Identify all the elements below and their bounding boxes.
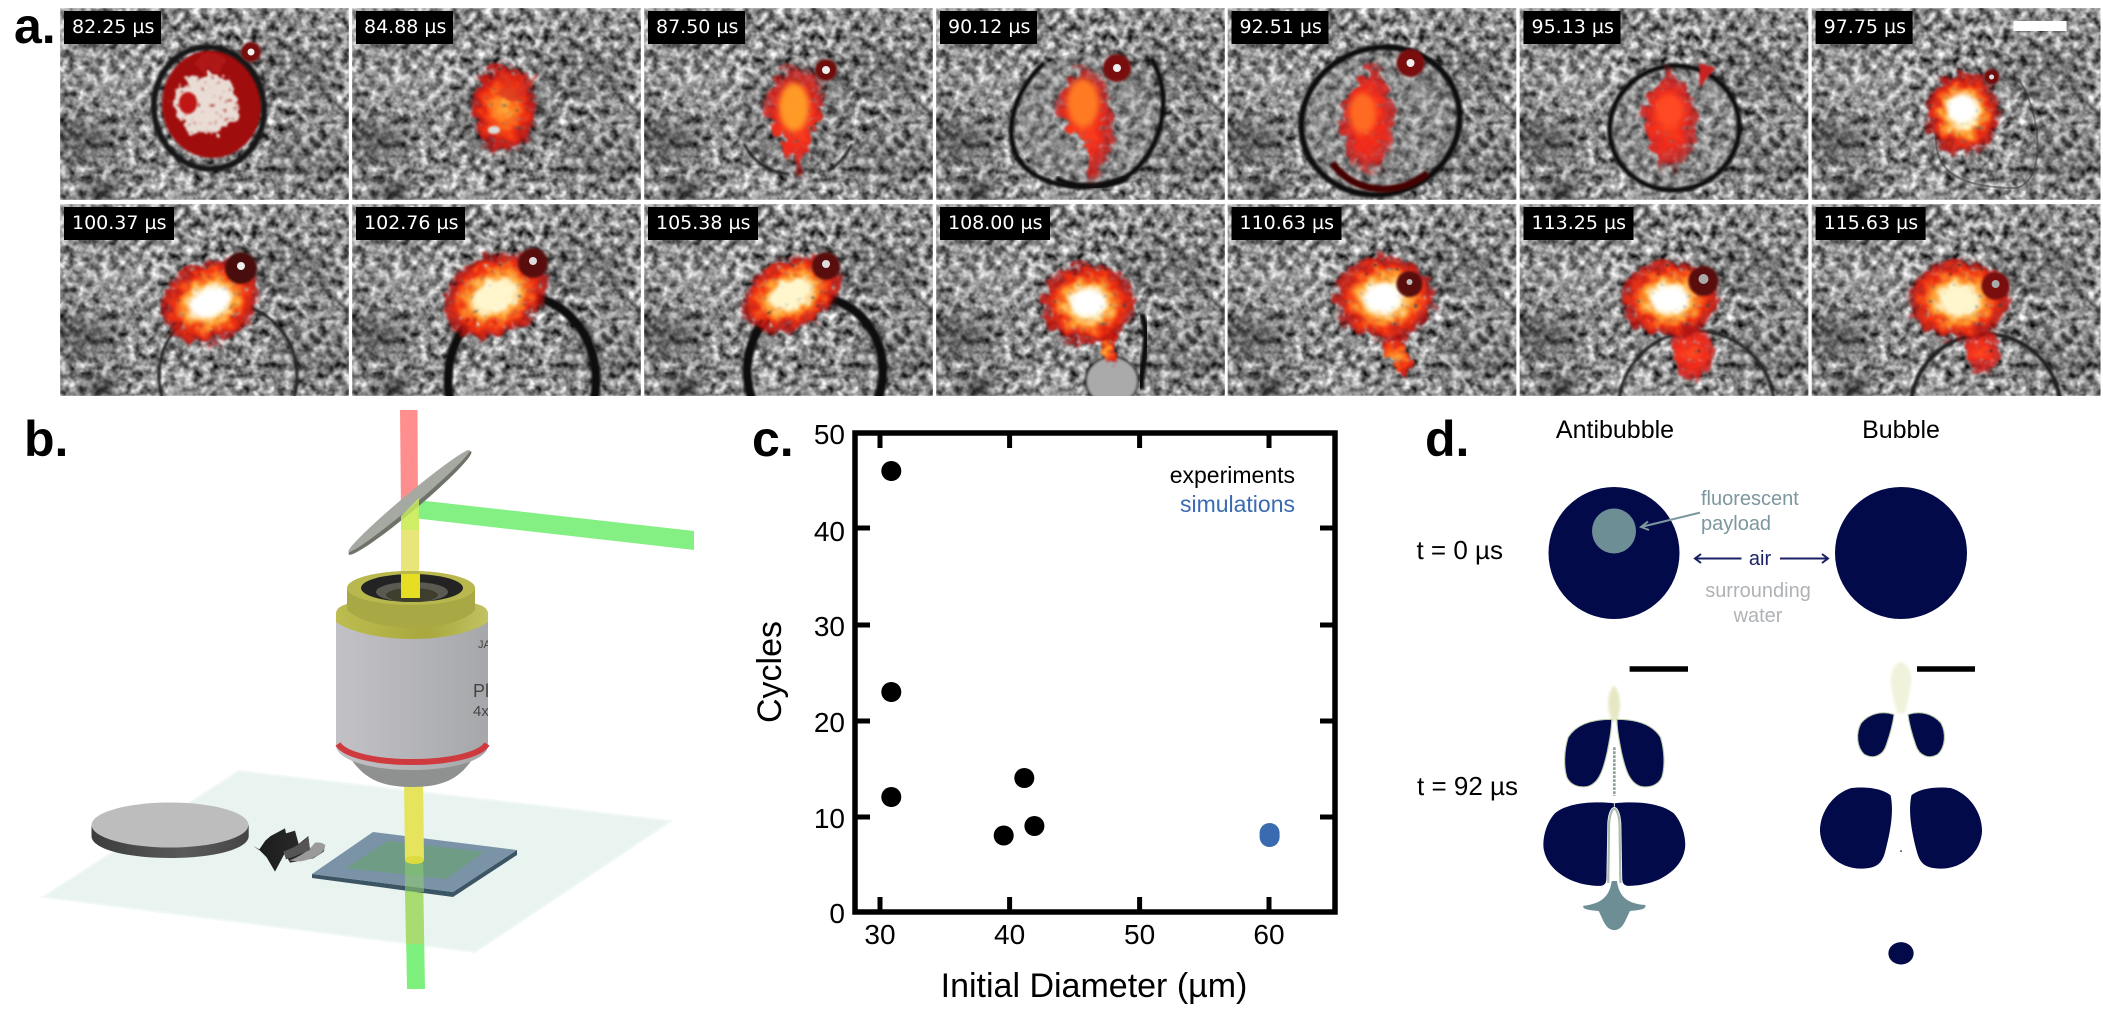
lower lobes: [1820, 787, 1982, 869]
x tick labels: 40: [994, 919, 1025, 950]
scale bars: [1630, 666, 1975, 672]
nose cone: [345, 750, 478, 787]
beam through sample: [405, 860, 424, 892]
plot frame: [855, 433, 1335, 912]
objective engraving: Plan: [473, 681, 509, 701]
frame 108.00 µs: 108.00 µs: [948, 212, 1043, 234]
frame 105.38 µs: 105.38 µs: [656, 212, 751, 234]
panel b: optical setup: [43, 410, 694, 989]
frame 97.75 µs: 97.75 µs: [1824, 16, 1906, 38]
frame 82.25 µs: [48, 8, 350, 205]
beam in objective: [401, 574, 420, 598]
frame 102.76 µs: [352, 204, 641, 396]
frame 100.37 µs: 100.37 µs: [72, 212, 167, 234]
frame 115.63 µs: [1812, 204, 2101, 396]
frame 108.00 µs: [924, 204, 1226, 405]
frame 105.38 µs: [644, 204, 933, 396]
panel label d: d.: [1425, 411, 1469, 467]
lens barrel: [336, 620, 488, 770]
panel c: scatter chart: [751, 419, 1335, 1005]
bubble at t=0: [1835, 487, 1967, 619]
satellite droplet: [1888, 942, 1914, 964]
simulation points: [1260, 823, 1280, 847]
objective engraving: ∞ / -: [467, 767, 486, 778]
x axis title: Initial Diameter (µm): [941, 967, 1247, 1005]
dichroic mirror: [344, 445, 476, 561]
metal disk: [92, 802, 249, 858]
olive collar: [336, 600, 488, 639]
objective aperture: [361, 574, 463, 602]
frame 97.75 µs: [1800, 8, 2102, 205]
top rim: [347, 571, 475, 605]
x tick labels: [864, 919, 1285, 950]
upper lobes: [1565, 719, 1664, 787]
frame 110.63 µs: [1216, 204, 1518, 401]
scale bar: [2014, 21, 2067, 31]
objective lens: [336, 571, 490, 787]
frame 84.88 µs: [340, 8, 642, 205]
arrow to payload: [1641, 513, 1700, 530]
payload thread: [1611, 747, 1617, 796]
panel d: simulation shapes: [1416, 416, 1982, 964]
frame 90.12 µs: 90.12 µs: [948, 16, 1030, 38]
row label t = 0: t = 0 µs: [1416, 535, 1503, 565]
frame 87.50 µs: [632, 8, 934, 205]
antibubble at t=92: [1543, 685, 1685, 930]
stage-covered beam section: [405, 892, 424, 944]
frame 87.50 µs: 87.50 µs: [656, 16, 738, 38]
column heading bubble: Bubble: [1862, 416, 1940, 444]
antibubble at t=0: [1548, 487, 1680, 619]
central slit edge: [1608, 809, 1620, 883]
x tick labels: 50: [1124, 919, 1155, 950]
frame 115.63 µs: 115.63 µs: [1824, 212, 1918, 234]
yellow beam above objective: [401, 500, 419, 600]
legend: simulations: [1180, 491, 1295, 517]
label fluorescent payload: fluorescent: [1701, 488, 1799, 510]
y tick labels: 30: [814, 611, 845, 642]
label surrounding water: water: [1733, 605, 1783, 627]
red ring: [338, 744, 487, 762]
speck: [1900, 850, 1902, 852]
y tick labels: 10: [814, 803, 845, 834]
fluorescent payload core: [1592, 508, 1636, 554]
beam spot on sample: [405, 856, 424, 864]
transducer fragment: [253, 828, 325, 872]
panel label c: c.: [752, 411, 794, 467]
plume: [1891, 661, 1911, 713]
objective engraving: JAPAN: [478, 639, 513, 651]
row label t = 92: t = 92 µs: [1417, 771, 1518, 801]
air arrows: [1695, 554, 1828, 563]
frame 82.25 µs: 82.25 µs: [72, 16, 154, 38]
frame 102.76 µs: 102.76 µs: [364, 212, 459, 234]
panel label b: b.: [24, 411, 68, 467]
label air: air: [1749, 548, 1771, 570]
frame 113.25 µs: [1520, 204, 1808, 396]
legend: [1170, 462, 1295, 517]
frame 113.25 µs: 113.25 µs: [1532, 212, 1626, 234]
sample slide: [312, 832, 517, 897]
frame 90.12 µs: [924, 8, 1226, 205]
y tick labels: 50: [814, 419, 845, 450]
y tick labels: [814, 419, 845, 929]
ejected payload: [1583, 881, 1645, 930]
yellow beam below objective: [404, 780, 424, 860]
experiment points: [881, 461, 1044, 846]
frame 95.13 µs: [1508, 8, 1810, 205]
frame 95.13 µs: 95.13 µs: [1532, 16, 1614, 38]
x tick labels: 30: [864, 919, 896, 950]
y tick labels: 20: [814, 707, 845, 738]
frame 100.37 µs: [60, 204, 349, 396]
frame 84.88 µs: 84.88 µs: [364, 16, 446, 38]
legend: experiments: [1170, 462, 1295, 488]
bubble at t=92: [1820, 661, 1982, 964]
y tick labels: 0: [829, 898, 845, 929]
objective engraving: 4x /: [473, 703, 498, 720]
x tick labels: 60: [1253, 919, 1285, 950]
glass stage plate: [43, 771, 671, 952]
label fluorescent payload: payload: [1701, 513, 1771, 535]
frame 92.51 µs: [1228, 8, 1516, 200]
red emission beam: [400, 410, 418, 510]
green excitation beam: [417, 500, 694, 550]
beam through mirror: [401, 498, 419, 530]
upper lobes: [1858, 713, 1944, 757]
objective engraving: [473, 640, 488, 716]
y tick labels: 40: [814, 516, 845, 547]
frame 92.51 µs: 92.51 µs: [1240, 16, 1322, 38]
frame 110.63 µs: 110.63 µs: [1240, 212, 1334, 234]
label surrounding water: surrounding: [1705, 580, 1811, 602]
jet plume: [1608, 685, 1620, 721]
column heading antibubble: Antibubble: [1556, 416, 1674, 444]
lower green beam: [405, 870, 425, 989]
y axis title: Cycles: [751, 621, 789, 723]
axis ticks: [855, 433, 1335, 912]
olive top ring: [347, 571, 475, 628]
panel a: time-lapse frames: [60, 8, 2101, 396]
lower lobes: [1543, 802, 1685, 886]
